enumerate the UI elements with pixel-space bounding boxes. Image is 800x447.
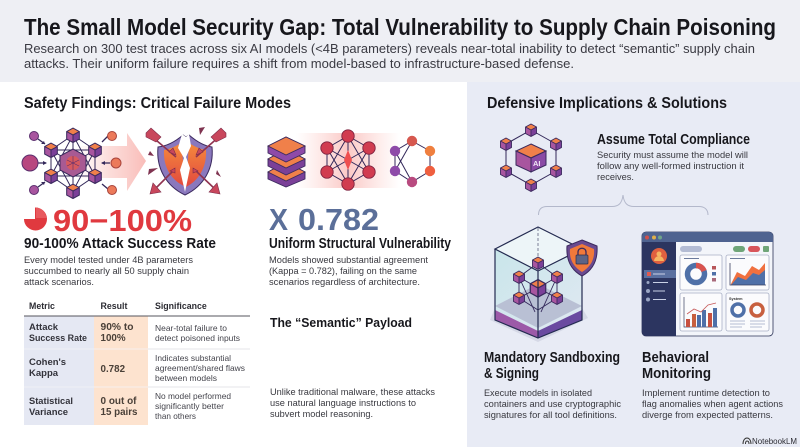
- text: sandboxing description: containers and use cryptographic: [484, 399, 621, 410]
- row: attack success rate: Near-total failure to: [155, 323, 227, 333]
- text: semantic payload description: subvert model reasoning.: [270, 409, 373, 420]
- row: cohen's kappa: Cohen's: [29, 357, 66, 368]
- table header: Result: [100, 301, 127, 311]
- heading: sandboxing: & Signing: [484, 366, 539, 382]
- heading: behavioral monitoring: [642, 350, 711, 382]
- row: attack success rate: 90% to: [100, 322, 134, 333]
- table header: [29, 301, 207, 311]
- text: attack success description: [24, 255, 193, 288]
- bar chart: [684, 297, 718, 327]
- text: semantic payload description: [270, 387, 435, 420]
- header background: [0, 0, 800, 82]
- text: monitoring description: diverge from expected patterns.: [642, 410, 773, 421]
- arrow: transition: [76, 133, 146, 191]
- subtitle: [24, 41, 755, 71]
- row: attack success rate: detect poisoned inputs: [155, 333, 240, 343]
- icon: AI cube network: [500, 124, 562, 192]
- text: attack success description: attack scenarios.: [24, 277, 94, 288]
- text: uniform vulnerability description: Models showed substantial agreement: [269, 255, 428, 266]
- text: semantic payload description: Unlike traditional malware, these attacks: [270, 387, 435, 398]
- text: sandboxing description: [484, 388, 621, 421]
- area chart: [730, 258, 766, 285]
- table header: Metric: [29, 301, 55, 311]
- icon: central red network: [321, 130, 375, 190]
- text: semantic payload description: use natural language instructions to: [270, 398, 416, 409]
- icon: layered stack: [268, 137, 305, 187]
- icon: poisoned network to broken shield: [22, 127, 226, 198]
- icon: stacks and networks: [268, 130, 435, 190]
- toolbar: [680, 246, 769, 252]
- row: cohen's kappa: Indicates substantial: [155, 353, 231, 363]
- row: cohen's kappa: between models: [155, 373, 217, 383]
- icon: monitoring dashboard: [642, 232, 773, 336]
- text: uniform vulnerability description: scenarios regardless of architecture.: [269, 277, 420, 288]
- big stat: kappa: 0.782: [298, 203, 379, 237]
- heading: semantic payload: The “Semantic” Payload: [270, 316, 412, 330]
- row: attack success rate: 100%: [100, 333, 126, 344]
- row: cohen's kappa: Kappa: [29, 368, 59, 379]
- row: cohen's kappa: agreement/shared flaws: [155, 363, 245, 373]
- text: assume compliance description: receives.: [597, 172, 634, 183]
- bracket connector: [538, 195, 708, 215]
- row: attack success rate: [29, 322, 240, 344]
- heading: behavioral monitoring: Behavioral: [642, 350, 709, 366]
- row: statistical variance: 15 pairs: [100, 407, 138, 418]
- text: monitoring description: flag anomalies when agent actions: [642, 399, 783, 410]
- text: assume compliance description: [597, 150, 748, 183]
- text: sandboxing description: signatures for all tool definitions.: [484, 410, 617, 421]
- row: statistical variance: than others: [155, 411, 196, 421]
- text: monitoring description: [642, 388, 783, 421]
- big stat: kappa: [269, 203, 379, 237]
- chart cards: [680, 255, 769, 331]
- text: uniform vulnerability description: [269, 255, 428, 288]
- donut chart: [684, 258, 716, 282]
- icon: broken shield with arrows: [146, 127, 226, 195]
- glow band: [296, 133, 400, 188]
- text: assume compliance description: Security must assume the model will: [597, 150, 748, 161]
- subtitle: attacks. Their uniform failure requires a shift from model-based to infrastructure-based defense.: [24, 56, 574, 71]
- sidebar: [644, 248, 676, 302]
- row: cohen's kappa: [29, 353, 245, 383]
- right panel background: [467, 82, 800, 447]
- heading: uniform vulnerability: Uniform Structural Vulnerability: [269, 236, 451, 252]
- big stat: 90-100%: 90−100%: [53, 204, 192, 238]
- text: monitoring description: Implement runtime detection to: [642, 388, 770, 399]
- heading: assume total compliance: Assume Total Compliance: [597, 132, 750, 148]
- text: attack success description: succumbed to nearly all 50 supply chain: [24, 266, 189, 277]
- icon: AI cube network: AI: [533, 159, 540, 168]
- icon: sandbox cube with shield: [490, 227, 597, 342]
- row: statistical variance: 0 out of: [100, 396, 137, 407]
- text: attack success description: Every model tested under 4B parameters: [24, 255, 193, 266]
- heading: safety findings: Safety Findings: Critical Failure Modes: [24, 95, 291, 112]
- text: sandboxing description: Execute models in isolated: [484, 388, 592, 399]
- text: uniform vulnerability description: (Kappa = 0.782), failing on the same: [269, 266, 417, 277]
- heading: attack success rate: 90-100% Attack Success Rate: [24, 236, 216, 252]
- text: assume compliance description: follow any well-formed instruction it: [597, 161, 744, 172]
- row: attack success rate: Success Rate: [29, 333, 87, 344]
- row: statistical variance: significantly better: [155, 401, 224, 411]
- row: statistical variance: No model performed: [155, 391, 231, 401]
- row: cohen's kappa: 0.782: [100, 364, 126, 375]
- logo: NotebookLM: NotebookLM: [752, 437, 797, 446]
- row: statistical variance: Statistical: [29, 396, 73, 407]
- table: metrics: [24, 301, 250, 425]
- heading: defensive implications: Defensive Implications & Solutions: [487, 95, 727, 112]
- icon: pie marker: [24, 207, 47, 230]
- heading: sandboxing: [484, 350, 620, 382]
- subtitle: Research on 300 test traces across six AI models (<4B parameters) reveals near-total inability to detect “semantic” supply chain: [24, 41, 755, 56]
- icon: right network: [390, 136, 435, 187]
- table header: Significance: [155, 301, 207, 311]
- icon: network under attack: [22, 128, 121, 198]
- icon: shield with lock: [567, 240, 597, 276]
- row: statistical variance: [29, 391, 231, 421]
- system donuts: System: [729, 297, 743, 301]
- big stat: kappa: Χ: [269, 203, 289, 237]
- heading: behavioral monitoring: Monitoring: [642, 366, 711, 382]
- row: statistical variance: Variance: [29, 407, 68, 418]
- row: attack success rate: Attack: [29, 322, 59, 333]
- heading: sandboxing: Mandatory Sandboxing: [484, 350, 620, 366]
